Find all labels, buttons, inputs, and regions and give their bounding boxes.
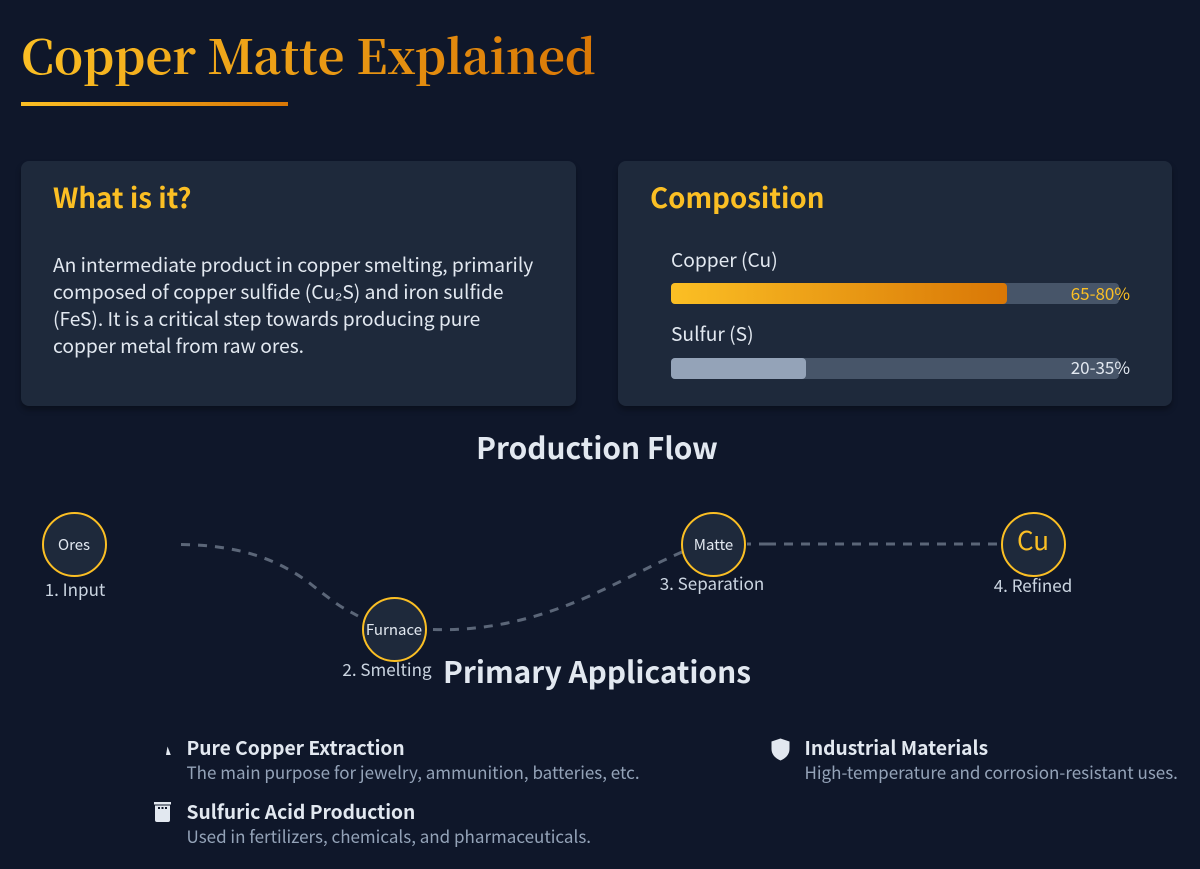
heading: production flow: Production Flow <box>476 424 718 468</box>
application: sulfuric acid <box>186 797 591 848</box>
label: sulfur: Sulfur (S) <box>671 319 754 347</box>
node: cu: Cu <box>1017 520 1049 558</box>
value: copper: 65-80% <box>1071 280 1130 305</box>
application title: Industrial Materials <box>804 733 988 761</box>
step label: separation: 3. Separation <box>660 570 764 595</box>
application description: The main purpose for jewelry, ammunition, batteries, etc. <box>186 759 640 784</box>
bar: copper <box>671 283 1119 304</box>
icon: jar <box>154 802 171 822</box>
node: matte <box>681 512 746 576</box>
step label: smelting: 2. Smelting <box>342 656 432 681</box>
value: sulfur: 20-35% <box>1071 354 1130 379</box>
application title: Pure Copper Extraction <box>186 733 405 761</box>
application: industrial materials <box>804 733 1178 784</box>
label: copper: Copper (Cu) <box>671 245 778 273</box>
heading: primary applications: Primary Applications <box>443 648 751 692</box>
flow connector lines <box>181 542 997 632</box>
icon: shield <box>772 738 790 760</box>
panel: composition <box>618 161 1172 406</box>
node: matte: Matte <box>694 534 733 554</box>
heading: composition: Composition <box>650 176 824 216</box>
application: pure copper <box>186 733 640 784</box>
application description: Used in fertilizers, chemicals, and pharmaceuticals. <box>186 823 591 848</box>
definition text: (FeS). It is a critical step towards producing pure <box>53 304 480 332</box>
panel: what is it <box>21 161 576 406</box>
definition text: copper metal from raw ores. <box>53 331 304 359</box>
bar: sulfur <box>671 358 1119 379</box>
definition text: An intermediate product in copper smelting, primarily <box>53 250 533 278</box>
step label: refined: 4. Refined <box>994 572 1072 597</box>
title underline <box>21 102 288 106</box>
application title: Sulfuric Acid Production <box>186 797 415 825</box>
node: ores <box>42 512 106 576</box>
node: furnace: Furnace <box>366 618 422 640</box>
node: ores: Ores <box>58 534 90 554</box>
definition text: composed of copper sulfide (Cu₂S) and iron sulfide <box>53 277 504 305</box>
node: furnace <box>362 596 426 662</box>
icon: pickaxe clipped <box>166 746 171 755</box>
node: cu <box>1000 512 1066 576</box>
step label: input: 1. Input <box>45 576 105 601</box>
application description: High-temperature and corrosion-resistant uses. <box>804 759 1178 784</box>
definition text <box>53 250 533 359</box>
heading: what is it: What is it? <box>53 176 192 216</box>
title: Copper Matte Explained <box>21 21 596 88</box>
